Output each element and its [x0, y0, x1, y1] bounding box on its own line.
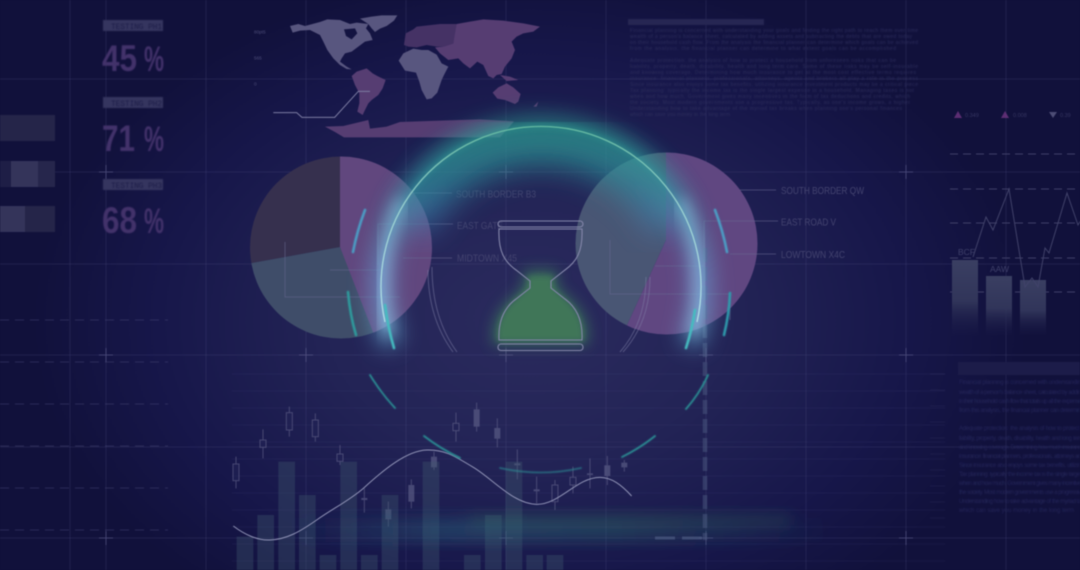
value: 45 percent [102, 38, 164, 79]
value: 71 percent [102, 118, 164, 159]
slice: purple [340, 156, 432, 332]
map: North America [290, 19, 373, 69]
bar labels: AAW [990, 264, 1009, 274]
bottom glow band [290, 514, 830, 542]
legend: 0.39 [1060, 113, 1071, 119]
slice: grey blue [575, 152, 666, 326]
value: 71 percent: % [144, 120, 164, 159]
pie labels: SOUTH BORDER QW [781, 185, 864, 197]
tag: testing ph1 [103, 20, 163, 32]
first paragraph: Financial planning is concerned with understanding your goals and finding the right path to reach them over time [630, 28, 918, 34]
tag: testing ph1: TESTING PH1 [111, 23, 162, 32]
panel: bottom right text block [958, 362, 1080, 514]
map: Asia [435, 19, 540, 78]
second paragraph: Adequate protection: the analysis of how to protect a household from unforeseen risks that can be [630, 58, 896, 64]
map: Africa [399, 49, 448, 99]
left dashed lines [0, 320, 168, 530]
inner ring curves [428, 267, 650, 352]
second paragraph: Tax planning: typically the income tax is the single largest expense in a household. Managing taxes is not [630, 88, 915, 94]
value: 68 percent: % [144, 202, 164, 241]
second paragraph: which can save you money in the long term [630, 112, 730, 118]
second paragraph: when and how much. Government gives many incentives in the form of tax deductions and credits, which [630, 94, 910, 100]
tag: testing ph3 [103, 179, 163, 191]
map: Europe [404, 24, 457, 47]
map: South America [352, 68, 386, 115]
slice: teal grey [251, 246, 374, 339]
value: 45 percent: 45 [102, 38, 137, 79]
map: axis labels [254, 29, 266, 86]
dashed rules [950, 154, 1080, 292]
value: 68 percent: 68 [102, 200, 137, 241]
heading bar [958, 362, 1080, 375]
map: islands [500, 75, 538, 107]
map: Greenland [360, 15, 397, 32]
legend: 0.349 [965, 113, 979, 119]
segmented ring [348, 210, 730, 472]
arc: core line [381, 126, 701, 322]
small bottom dashes [655, 536, 702, 540]
second paragraph: and knowing coverage. Determining how much insurance to get at the most cost effective terms requires [630, 70, 917, 76]
line [973, 189, 1080, 287]
map: Antarctica [325, 119, 514, 137]
bar labels [958, 247, 1009, 274]
bars [952, 260, 1046, 335]
heading bar [628, 19, 764, 25]
panel: left test percentages [102, 20, 164, 241]
legend: 0.008 [1013, 113, 1027, 119]
pie leader lines [285, 190, 778, 320]
map: axis labels: 0 [254, 81, 257, 86]
hourglass outline [498, 221, 583, 350]
glowing arc [381, 126, 701, 345]
trend curve [233, 450, 632, 540]
paragraph two [958, 426, 1080, 514]
candlestick chart [233, 403, 627, 527]
second paragraph: Understanding how to take advantage of the myriad tax breaks when planning one's personal finances [630, 106, 902, 112]
pie labels: MIDTOWN X45 [457, 252, 517, 264]
glow: right side highlight [680, 200, 699, 335]
first paragraph: wealth of a person's balance sheet, calculated by adding assets and subtracting the debts that are owed today [630, 34, 912, 40]
panel: right line and bar chart [950, 111, 1080, 335]
map: Australia [493, 83, 521, 104]
hourglass sand [498, 276, 583, 341]
first paragraph: on their household cash flow. From the analysis the financial planner can determine which goals can be achieved [630, 40, 918, 46]
paragraph two: which can save you money in the long term [958, 508, 1074, 514]
arc: wide inner glow [412, 147, 670, 228]
tag: testing ph2 [103, 97, 163, 109]
tag: testing ph2: TESTING PH2 [111, 100, 162, 109]
map: axis labels: 565 [254, 55, 262, 60]
arc: side and top glow [381, 127, 701, 345]
arc: near glow [381, 127, 701, 330]
glow: left side highlight [383, 200, 402, 335]
second paragraph [630, 58, 918, 118]
value: 68 percent [102, 200, 164, 241]
vertical dashed track [703, 248, 707, 540]
hourglass icon [493, 221, 588, 350]
map: leader line [273, 91, 370, 117]
value: 71 percent: 71 [102, 118, 135, 159]
map: axis labels: 80pt5 [254, 29, 266, 34]
slice: purple [626, 152, 758, 335]
right pie chart [570, 150, 765, 340]
second paragraph: liability, property, death, disability, health and long term care. Some of these risks may be self-insurable [630, 64, 918, 70]
value: 45 percent: % [144, 40, 164, 79]
bottom bar chart [237, 462, 563, 570]
bar labels: BCF [958, 247, 975, 257]
first paragraph [630, 28, 918, 52]
left pie chart [250, 156, 432, 339]
pie labels: EAST ROAD V [781, 216, 836, 228]
paragraph one [958, 380, 1080, 414]
pie labels [456, 185, 864, 264]
pie labels: EAST GATE [457, 220, 503, 232]
first paragraph: from the analysis, the financial planner can determine to what extent goals can be accomplished [630, 46, 896, 52]
sand glow [493, 270, 588, 345]
pie labels: LOWTOWN X4C [781, 249, 845, 261]
second paragraph: Since insurance also enjoys some tax benefits, utilizing insurance investment products may be a critical piece [630, 82, 918, 88]
tag: testing ph3: TESTING PH3 [111, 182, 162, 191]
second paragraph: insurance: financial planners, professionals, attorneys, agents and brokers all play a role in the process [630, 76, 918, 82]
crosshair markers [99, 165, 913, 545]
pie labels: SOUTH BORDER B3 [456, 188, 536, 200]
legend [954, 111, 1071, 119]
world map [254, 15, 540, 137]
second paragraph: the society. Most modern governments use a progressive tax. Typically, as one's income grows, a higher [630, 100, 910, 106]
panel: top text block [628, 19, 918, 118]
slice: dark [250, 156, 340, 263]
left block bars [0, 115, 55, 232]
